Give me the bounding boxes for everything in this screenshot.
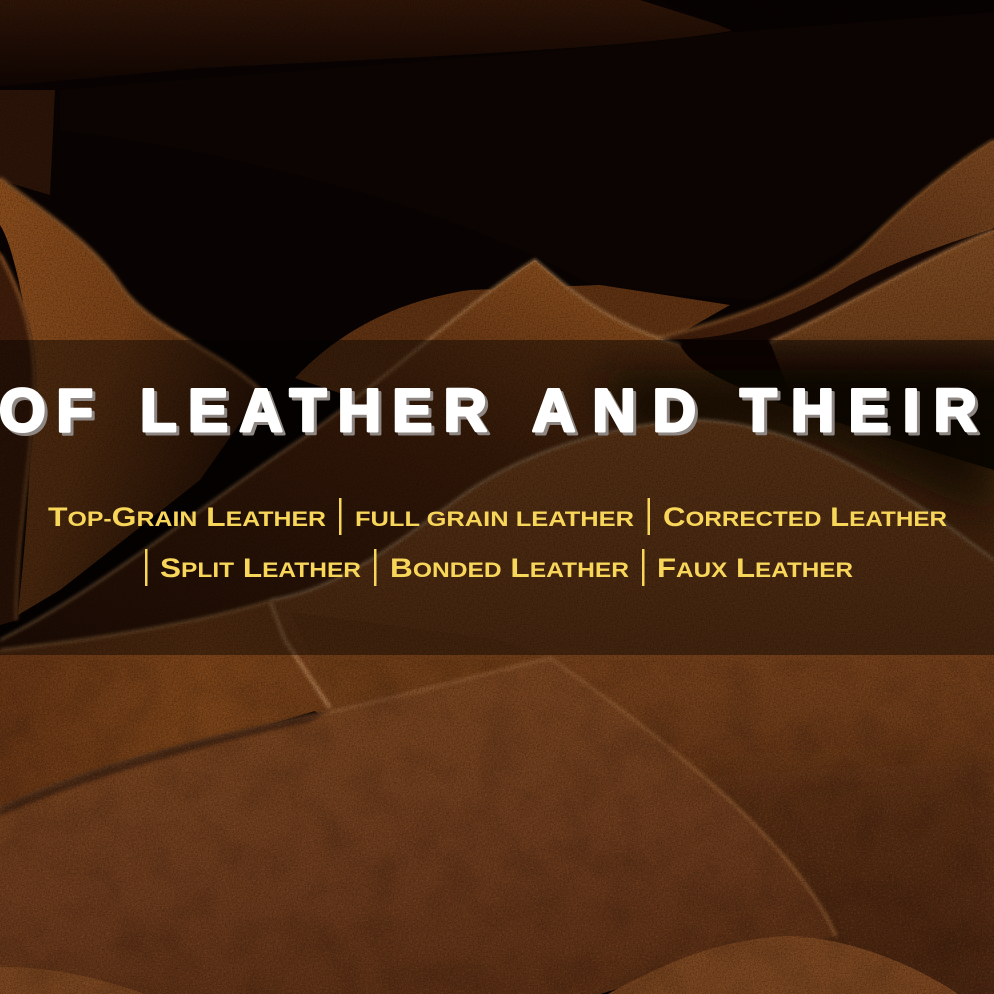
leather: central peak piece bbox=[0, 260, 994, 660]
leather: big front piece bbox=[0, 658, 836, 994]
title bbox=[0, 377, 980, 447]
leather: right shadow bbox=[640, 760, 994, 994]
leather types list bbox=[48, 498, 947, 586]
list row 1: CORRECTED LEATHER bbox=[663, 502, 947, 532]
title text: AND bbox=[532, 377, 696, 444]
title shadow: LEATHER bbox=[143, 380, 490, 447]
title shadow: THEIR bbox=[743, 380, 980, 447]
leather: bottom left piece bbox=[0, 967, 145, 994]
title shadow: OF bbox=[2, 380, 96, 447]
list row 1 bbox=[48, 498, 947, 535]
title text: OF bbox=[0, 377, 93, 444]
list row 2 bbox=[145, 549, 853, 586]
leather: back middle piece bbox=[295, 285, 730, 420]
title text: LEATHER bbox=[140, 377, 487, 444]
title text bbox=[0, 377, 977, 444]
leather: left curled piece bbox=[0, 178, 262, 625]
translucent banner bbox=[0, 340, 994, 655]
leather mottling texture bbox=[0, 660, 994, 994]
list row 2: FAUX LEATHER bbox=[657, 553, 853, 583]
list row 1: TOP- GRAIN LEATHER bbox=[48, 502, 326, 532]
list row 2: BONDED LEATHER bbox=[390, 553, 629, 583]
title shadow bbox=[2, 380, 980, 447]
leather: lower left strip bbox=[0, 601, 550, 808]
title text: THEIR bbox=[740, 377, 977, 444]
list row 1: FULL GRAIN LEATHER bbox=[355, 508, 634, 531]
leather speckle texture bbox=[0, 660, 994, 994]
leather: top dark folds bbox=[0, 0, 994, 300]
leather: large arch piece bbox=[270, 420, 994, 994]
title shadow: AND bbox=[535, 380, 699, 447]
list row 2: SPLIT LEATHER bbox=[160, 553, 361, 583]
leather: bottom right piece bbox=[608, 936, 958, 994]
leather: right waves bbox=[650, 140, 994, 560]
